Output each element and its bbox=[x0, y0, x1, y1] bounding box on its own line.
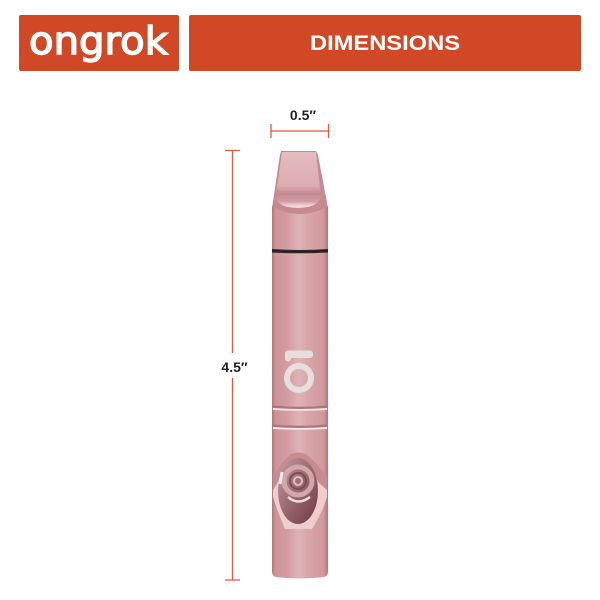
sealing ring bbox=[272, 249, 328, 253]
width dimension bbox=[271, 107, 328, 138]
mouthpiece collar bbox=[272, 206, 328, 225]
logo mark on body bbox=[285, 350, 313, 390]
logo wordmark: ongrok bbox=[29, 19, 168, 63]
bowl opening rim bbox=[273, 452, 327, 529]
height dimension bbox=[221, 150, 248, 580]
heading banner bbox=[189, 15, 581, 71]
product: pink pen bbox=[272, 151, 328, 578]
main body bbox=[272, 212, 328, 578]
heading text: DIMENSIONS bbox=[310, 32, 460, 55]
silver band lower bbox=[273, 424, 327, 430]
silver band upper bbox=[273, 406, 327, 411]
bowl opening bbox=[278, 458, 318, 524]
glass bowl bbox=[280, 467, 312, 502]
height line bbox=[225, 150, 240, 580]
height label: 4.5″ bbox=[221, 359, 248, 375]
mouthpiece scoop face bbox=[276, 152, 321, 208]
logo panel bbox=[19, 15, 179, 71]
mouthpiece sides bbox=[272, 151, 328, 216]
width label: 0.5″ bbox=[290, 107, 316, 123]
bowl rim upper shade bbox=[273, 452, 327, 490]
